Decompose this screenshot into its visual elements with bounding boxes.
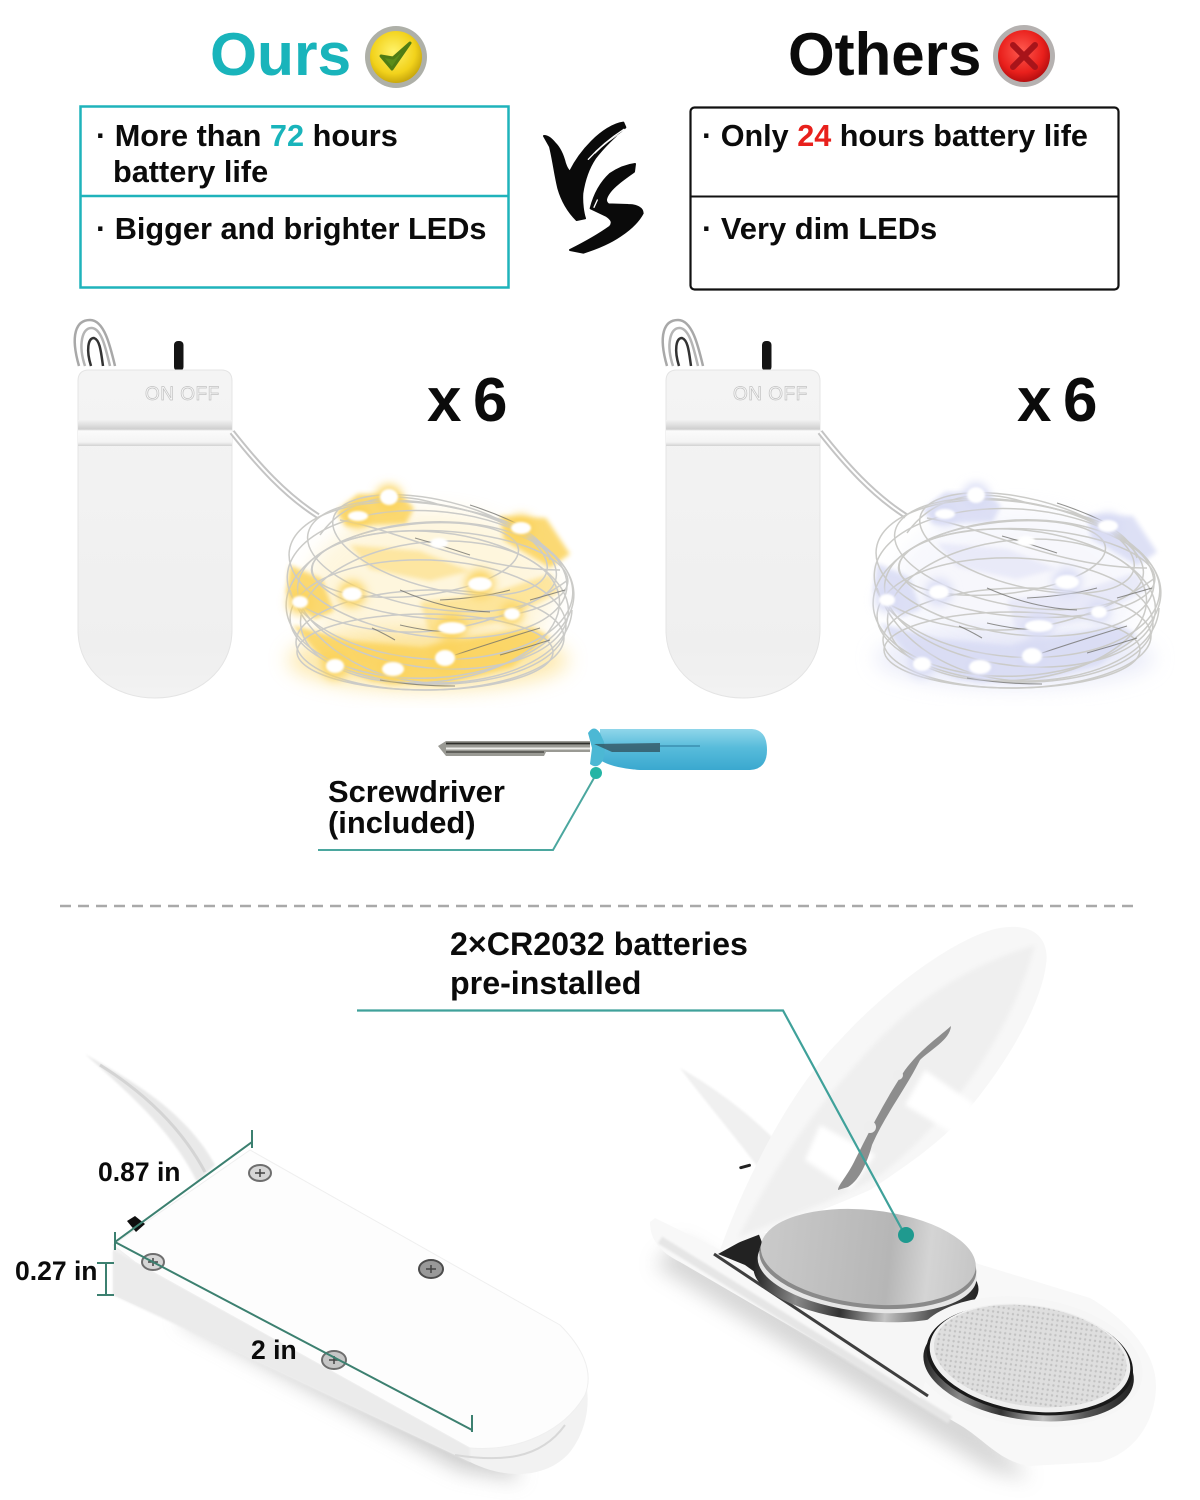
callout: batteries pre-installed: pre-installed (450, 965, 641, 1001)
lid metal contact (838, 1026, 951, 1190)
dimension: length (115, 1242, 472, 1432)
product: open battery case (650, 927, 1156, 1480)
panel: ours benefits (80, 106, 509, 288)
callout: screwdriver (318, 774, 594, 850)
dimension: length: 2 in (251, 1335, 297, 1365)
panel: others drawbacks (690, 108, 1118, 290)
dimension: width: 0.87 in (98, 1157, 180, 1187)
case lid (720, 927, 1047, 1250)
icon: red cross badge (993, 25, 1055, 87)
switch knob (127, 1216, 145, 1232)
product: closed battery case (85, 1054, 588, 1480)
text: others quantity: 6 (1063, 366, 1097, 435)
product: warm yellow LED coil (280, 476, 578, 695)
product: ours battery holder (75, 320, 318, 698)
product: others battery holder (663, 320, 906, 698)
text: battery life others: · Only 24 hours battery life (702, 119, 1088, 153)
icon: screws (142, 1165, 443, 1369)
callout dot (590, 767, 602, 779)
heading: Others: Others (788, 21, 981, 88)
text: ON OFF switch others: ON OFF (733, 384, 808, 405)
dimension: height (15, 1256, 114, 1295)
panel: ours benefits: battery life (113, 154, 268, 189)
dimension: width (98, 1130, 252, 1250)
callout: screwdriver: Screwdriver (328, 774, 505, 809)
icon: yellow check badge (365, 26, 427, 88)
icon: brush VS mark (544, 123, 643, 253)
product: screwdriver (438, 728, 767, 779)
text: ON OFF switch: ON OFF (145, 384, 220, 405)
text: brighter LEDs: · Bigger and brighter LEDs (96, 211, 486, 246)
text: dim LEDs: · Very dim LEDs (702, 211, 937, 246)
text: others quantity: x (1017, 366, 1052, 435)
battery: lower coin cell (904, 1282, 1151, 1441)
battery: upper coin cell (749, 1198, 986, 1332)
text: ours quantity: x (427, 366, 462, 435)
dimension: height: 0.27 in (15, 1256, 98, 1286)
callout: batteries pre-installed (357, 926, 914, 1243)
callout: screwdriver: (included) (328, 805, 476, 840)
text: ours quantity: 6 (473, 366, 507, 435)
heading: Ours (210, 20, 427, 88)
product: cool white LED coil (867, 474, 1165, 693)
heading: Ours: Ours (210, 20, 351, 88)
case base (650, 1218, 1156, 1466)
callout: batteries pre-installed: 2×CR2032 batteries (450, 926, 748, 962)
text: battery life ours: · More than 72 hours (96, 118, 398, 153)
